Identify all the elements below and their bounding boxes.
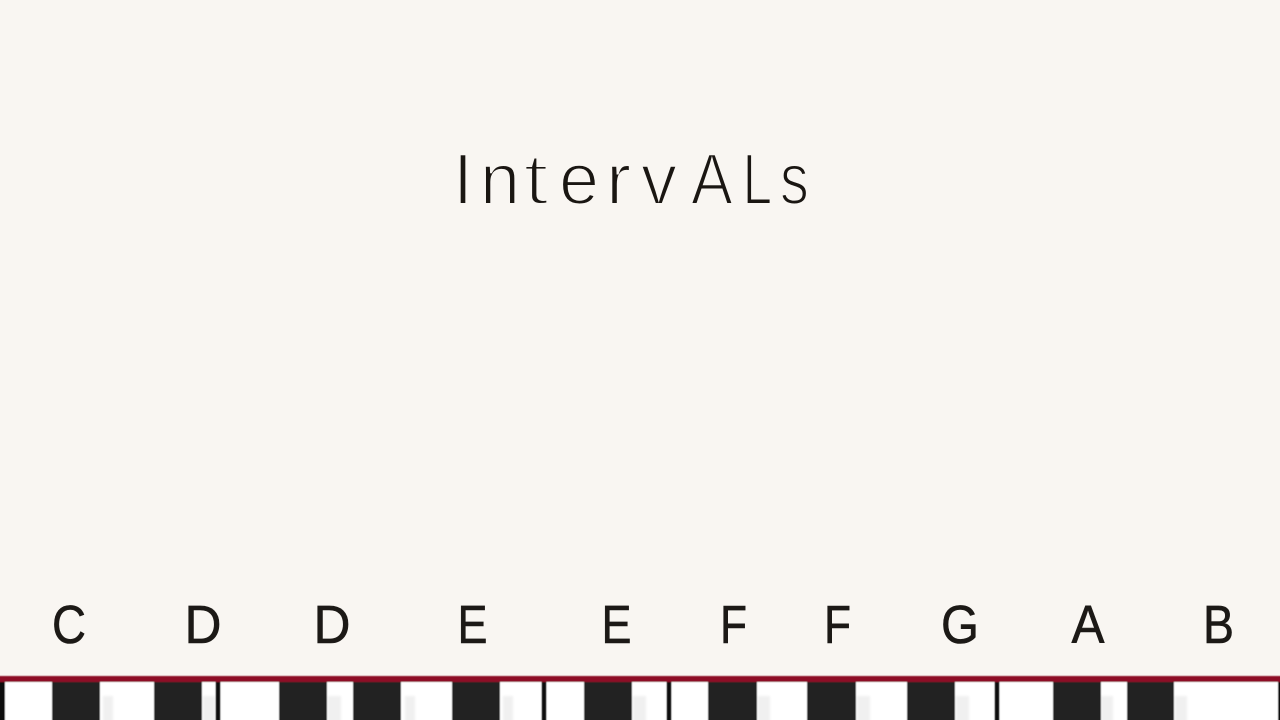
label: B: B — [1203, 595, 1234, 655]
key dividers — [0, 681, 1280, 720]
title: A — [691, 140, 733, 220]
title: e — [559, 140, 599, 220]
note labels — [52, 595, 1234, 655]
key shadows — [103, 696, 1187, 720]
title: r — [606, 139, 631, 220]
black keys — [52, 681, 1174, 720]
piano keyboard — [0, 676, 1280, 720]
label: A: A — [1072, 595, 1104, 655]
title — [453, 138, 809, 220]
title: v — [641, 140, 677, 220]
title: In — [453, 140, 520, 220]
title: L — [742, 140, 772, 220]
red top rail — [0, 676, 1280, 682]
label: D: D — [184, 595, 222, 655]
label: D: D — [314, 595, 350, 655]
label: F: F — [824, 595, 851, 655]
label: G: G — [941, 595, 979, 655]
title: t — [523, 138, 549, 220]
white keys — [0, 681, 1280, 720]
label: E: E — [458, 595, 488, 655]
label: C: C — [52, 595, 86, 655]
label: F: F — [720, 595, 747, 655]
label: E: E — [602, 595, 632, 655]
title: s — [780, 139, 809, 219]
